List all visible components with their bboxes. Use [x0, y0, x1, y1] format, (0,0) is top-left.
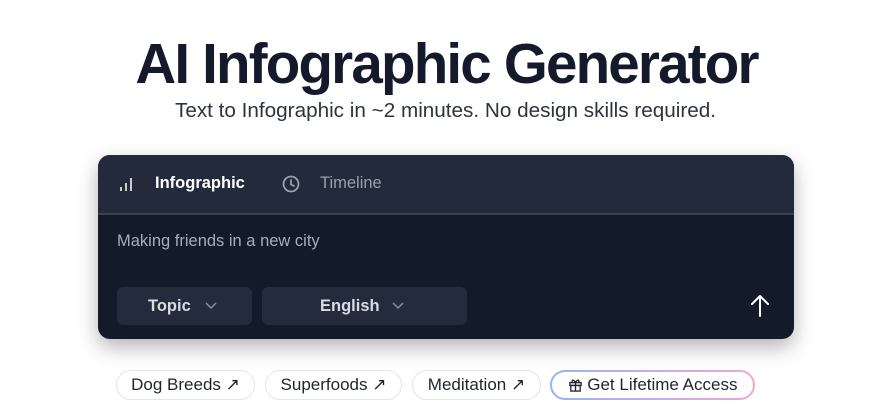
pill: Meditation — [412, 370, 541, 400]
icon: clock — [282, 176, 300, 192]
panel: input card — [98, 155, 794, 339]
dropdown: Topic — [117, 287, 252, 325]
pill: Get Lifetime Access — [550, 370, 755, 400]
icon: submit arrow — [751, 295, 769, 317]
icon: bars — [120, 178, 132, 191]
pill: Superfoods: Superfoods ↗ — [281, 375, 386, 394]
title: AI Infographic Generator — [135, 32, 758, 95]
pill: Dog Breeds — [116, 370, 255, 400]
pill: Meditation: Meditation ↗ — [428, 375, 525, 394]
pill: Dog Breeds: Dog Breeds ↗ — [131, 375, 240, 394]
pill: Get Lifetime Access: Get Lifetime Access — [587, 375, 737, 394]
tab bar — [98, 155, 794, 215]
dropdown: Topic: Topic — [148, 297, 191, 315]
pill: Superfoods — [265, 370, 402, 400]
tab: Infographic: Infographic — [155, 174, 245, 192]
tab: Timeline: Timeline — [320, 174, 382, 192]
dropdown: English — [262, 287, 467, 325]
subtitle: Text to Infographic in ~2 minutes. No design skills required. — [175, 99, 716, 122]
dropdown: English: English — [320, 297, 380, 315]
input text: Making friends in a new city — [117, 232, 320, 250]
